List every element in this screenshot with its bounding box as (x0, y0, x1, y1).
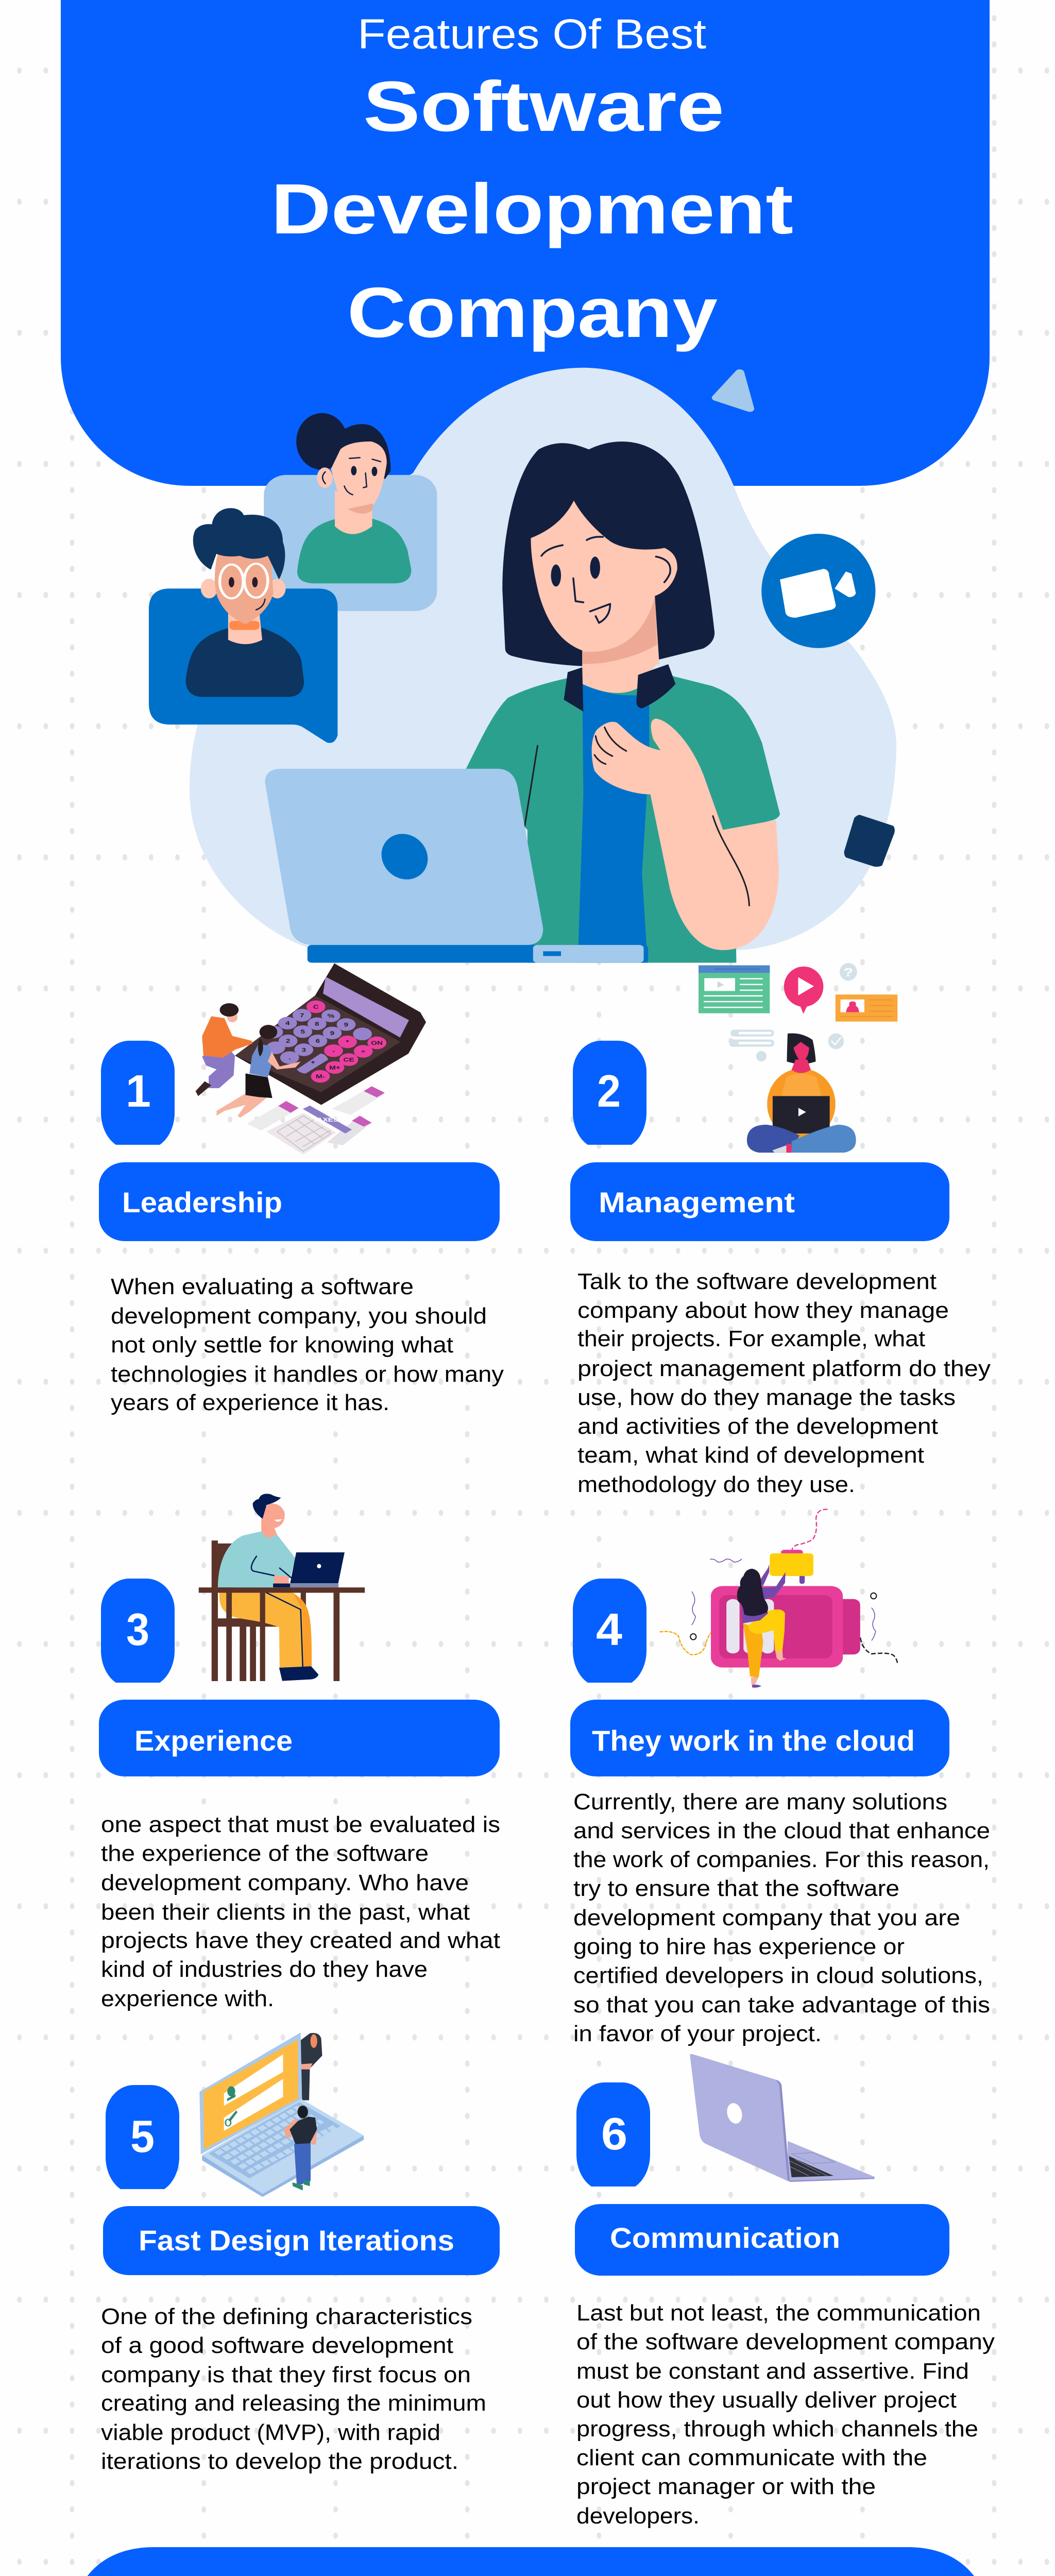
text block 1: development company, you should (111, 1303, 487, 1329)
text block 6: of the software development company (576, 2329, 995, 2354)
text block 2 (577, 1269, 991, 1497)
text block 4: certified developers in cloud solutions, (573, 1963, 983, 1988)
laptop base (202, 2098, 364, 2197)
chat and status icons (729, 963, 857, 1061)
heading: communication (575, 2204, 949, 2276)
text block 5: iterations to develop the product. (101, 2449, 458, 2474)
illustration: calculator: 2 (286, 1038, 290, 1044)
illustration: woman watching video (699, 963, 897, 1153)
illustration: calculator (196, 963, 426, 1155)
illustration: calculator: ON (371, 1040, 383, 1046)
hero background blob (190, 368, 896, 950)
number badge 5 (106, 2085, 179, 2189)
illustration: calculator: 9 (344, 1021, 349, 1028)
text block 6: project manager or with the (576, 2474, 876, 2499)
seated woman (747, 1033, 856, 1153)
laptop screen (199, 2032, 302, 2155)
illustration: calculator: 4 (285, 1020, 290, 1026)
front caller speech bubble (149, 508, 337, 743)
text block 3: the experience of the software (101, 1841, 429, 1866)
text block 2: team, what kind of development (577, 1443, 924, 1468)
text block 1: technologies it handles or how many (111, 1362, 504, 1387)
text block 4: going to hire has experience or (573, 1934, 905, 1959)
heading: leadership: Leadership (122, 1186, 282, 1218)
dashed connectors (660, 1510, 897, 1665)
climbing woman (737, 1564, 786, 1688)
hand and arm (592, 719, 779, 950)
illustration: calculator: * (346, 1039, 349, 1045)
number badge 4: 4 (596, 1604, 622, 1655)
text block 1: When evaluating a software (111, 1274, 414, 1299)
illustration: calculator: . (288, 1054, 291, 1061)
illustration: calculator: 8 (315, 1021, 319, 1027)
title: Features Of Best (358, 11, 706, 58)
text block 6: must be constant and assertive. Find (576, 2359, 969, 2384)
text block 4: the work of companies. For this reason, (573, 1847, 990, 1872)
text block 5: One of the defining characteristics (101, 2304, 472, 2329)
chat and status icons: ? (843, 966, 853, 979)
illustration: calculator: M+ (329, 1064, 341, 1071)
text block 3: experience with. (101, 1986, 274, 2011)
text block 1 (111, 1274, 504, 1415)
laptop (265, 769, 648, 963)
text block 4: development company that you are (573, 1905, 960, 1930)
panel 2: management (570, 963, 991, 1497)
text block 2: project management platform do they (577, 1356, 991, 1381)
panel 5: fast design iterations (101, 2032, 500, 2474)
panel 6: communication (575, 2054, 995, 2529)
tax sheets (247, 1086, 385, 1155)
text block 4: try to ensure that the software (573, 1876, 899, 1901)
floating triangle (716, 372, 750, 409)
tax sheets: TAXES (313, 1116, 338, 1123)
text block 3: one aspect that must be evaluated is (101, 1812, 500, 1837)
illustration: calculator: 9 (330, 1030, 335, 1036)
back caller (264, 413, 437, 611)
heading: management (570, 1162, 949, 1241)
illustration: calculator: 7 (300, 1012, 304, 1019)
text block 6: Last but not least, the communication (576, 2300, 981, 2326)
text block 1: years of experience it has. (111, 1390, 389, 1415)
text block 4: in favor of your project. (573, 2021, 822, 2046)
number badge 2: 2 (597, 1065, 621, 1116)
main woman (466, 442, 780, 963)
number badge 2 (573, 1041, 646, 1145)
face and neck (531, 501, 677, 666)
text block 4: so that you can take advantage of this (573, 1992, 990, 2018)
text block 6 (576, 2300, 995, 2529)
icon: video camera (761, 534, 875, 648)
text block 1: not only settle for knowing what (111, 1332, 453, 1358)
text block 4 (573, 1789, 990, 2046)
text block 5: viable product (MVP), with rapid (101, 2420, 440, 2445)
heading: management: Management (599, 1186, 795, 1218)
illustration: calculator: 6 (316, 1038, 320, 1044)
text block 3: projects have they created and what (101, 1928, 500, 1953)
illustration: calculator: CE (343, 1056, 354, 1063)
text block 3: kind of industries do they have (101, 1957, 428, 1982)
shirt (466, 676, 780, 963)
number badge 4 (573, 1579, 646, 1683)
panel 1: leadership (99, 963, 504, 1415)
text block 6: developers. (576, 2503, 700, 2529)
hair (502, 442, 714, 666)
illustration: calculator: C (313, 1004, 319, 1010)
heading: communication: Communication (610, 2222, 840, 2254)
text block 2: their projects. For example, what (577, 1326, 925, 1351)
text block 3: development company. Who have (101, 1870, 469, 1895)
number badge 5: 5 (130, 2111, 155, 2162)
title: Development (271, 170, 793, 249)
inner blue tee (578, 684, 649, 963)
illustration: calculator: M- (316, 1073, 325, 1080)
heading: leadership (99, 1162, 500, 1241)
number badge 1 (101, 1041, 175, 1145)
title: Software (363, 67, 724, 146)
footer band with website (67, 2547, 995, 2576)
floating square (844, 815, 895, 867)
text block 4: Currently, there are many solutions (573, 1789, 947, 1815)
text block 2: and activities of the development (577, 1414, 938, 1439)
number badge 6 (576, 2082, 650, 2187)
collar (564, 667, 583, 711)
text block 2: Talk to the software development (577, 1269, 937, 1294)
number badge 6: 6 (601, 2108, 627, 2159)
title (271, 11, 793, 352)
illustration: calculator: 5 (300, 1028, 305, 1035)
text block 2: company about how they manage (577, 1298, 949, 1323)
text block 6: out how they usually deliver project (576, 2387, 957, 2413)
plug (770, 1550, 813, 1584)
calculator people (196, 1003, 301, 1118)
heading: experience (99, 1700, 500, 1776)
heading: cloud (570, 1700, 949, 1776)
text block 3 (101, 1812, 500, 2011)
text block 5 (101, 2304, 486, 2474)
text block 5: company is that they first focus on (101, 2362, 471, 2387)
illustration: calculator: - (332, 1047, 335, 1054)
heading: fast design iterations (103, 2206, 500, 2275)
header banner (61, 0, 990, 486)
illustration: calculator: 3 (302, 1046, 307, 1053)
illustration: open laptop back (690, 2054, 874, 2182)
login icons (226, 2086, 237, 2126)
text block 5: of a good software development (101, 2333, 453, 2358)
hooded figure (300, 2033, 322, 2100)
number badge 3: 3 (126, 1604, 149, 1655)
number badge 1: 1 (126, 1065, 151, 1116)
title: Company (347, 273, 718, 352)
profile card (836, 994, 897, 1022)
play bubble (784, 967, 823, 1014)
panel 4: cloud (570, 1510, 990, 2046)
hero illustration: video call (149, 368, 896, 963)
man on keyboard (284, 2106, 317, 2191)
text block 4: and services in the cloud that enhance (573, 1818, 990, 1843)
text block 6: client can communicate with the (576, 2445, 927, 2470)
heading: experience: Experience (134, 1724, 293, 1757)
illustration: man at desk (199, 1494, 365, 1681)
illustration: isometric laptop (199, 2032, 364, 2197)
illustration: calculator: ÷ (361, 1048, 366, 1055)
illustration: calculator: + (311, 1059, 315, 1065)
illustration: woman and battery (660, 1510, 897, 1688)
heading: cloud: They work in the cloud (592, 1724, 915, 1757)
text block 2: methodology do they use. (577, 1472, 855, 1497)
illustration: calculator: % (328, 1012, 334, 1019)
heading: fast design iterations: Fast Design Iterations (139, 2224, 454, 2257)
battery (711, 1586, 860, 1668)
text block 2: use, how do they manage the tasks (577, 1385, 956, 1410)
panel 3: experience (99, 1494, 500, 2011)
text block 5: creating and releasing the minimum (101, 2391, 486, 2416)
number badge 3 (101, 1579, 175, 1683)
text block 6: progress, through which channels the (576, 2416, 978, 2442)
browser card (699, 965, 770, 1013)
text block 3: been their clients in the past, what (101, 1900, 470, 1925)
